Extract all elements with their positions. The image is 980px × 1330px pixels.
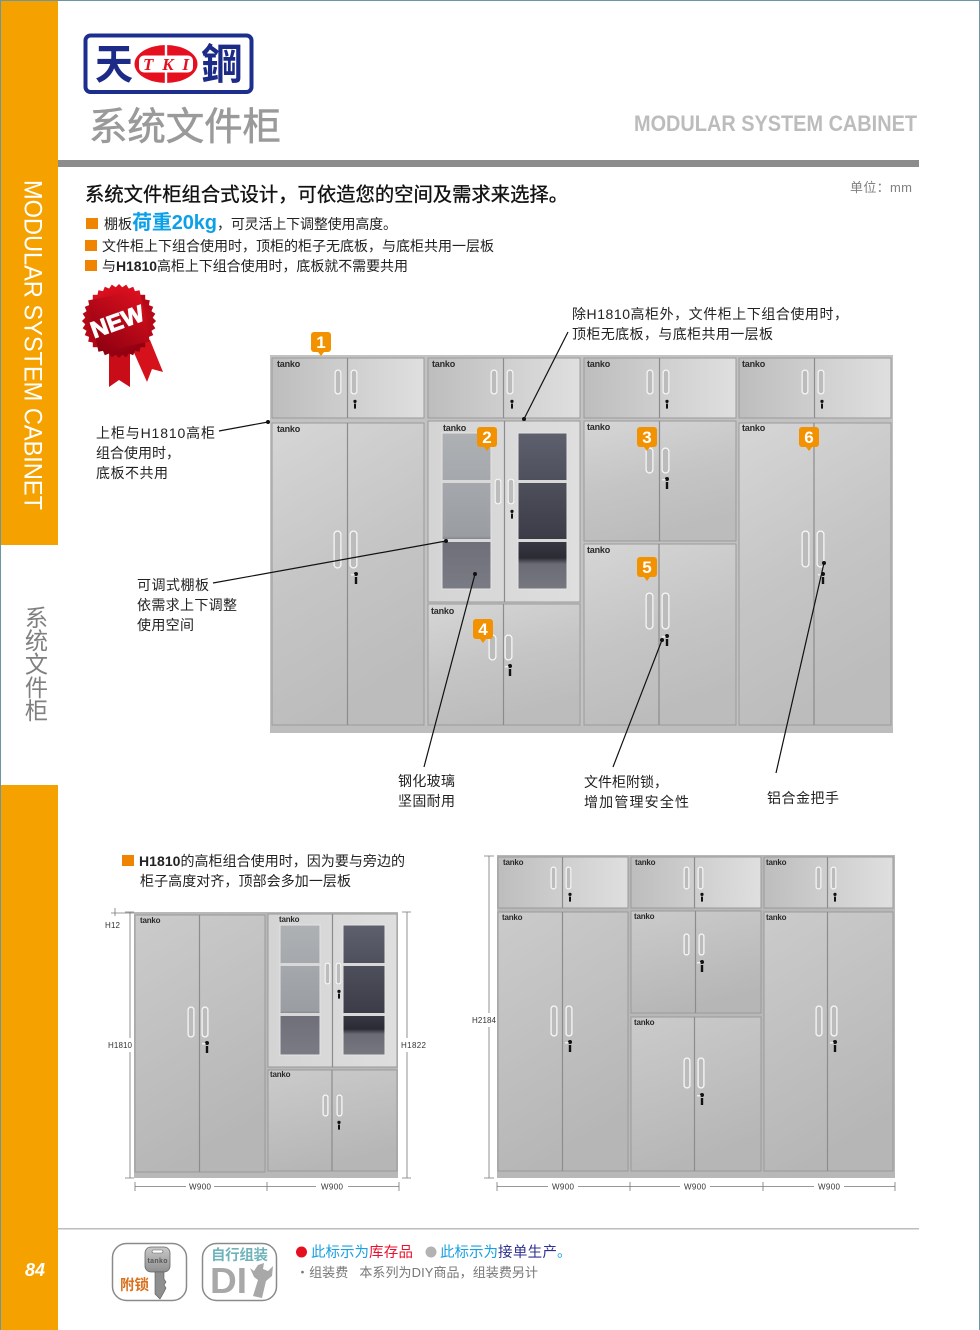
right tall cabinet: tanko xyxy=(766,913,787,922)
feature list: 与H1810高柜上下组合使用时，底板就不需要共用 xyxy=(102,258,408,274)
callout: aluminium handle xyxy=(767,561,839,806)
callout: adjustable shelf: 依需求上下调整 xyxy=(137,597,237,613)
callout: cabinet lock xyxy=(584,638,689,810)
icon: lock key: tanko xyxy=(148,1258,168,1265)
logo: TKI brand: TKI xyxy=(143,55,190,74)
icon: DIY assembly: DI xyxy=(210,1260,247,1301)
left tall cabinet: tanko xyxy=(502,913,523,922)
feature list: 棚板 xyxy=(104,216,132,232)
dimensions: H1810 combination: H1810 xyxy=(108,1041,133,1050)
dimensions: H1810 combination xyxy=(105,908,427,1192)
badge 2 xyxy=(477,427,497,451)
legend: stock and made to order: 。 xyxy=(557,1245,572,1261)
column 4 tall cabinet: tanko xyxy=(742,423,766,433)
dimensions: H1810 combination: W900 xyxy=(189,1182,212,1192)
right tall cabinet xyxy=(764,912,893,1171)
top cabinets: tanko xyxy=(277,359,301,369)
left tall cabinet xyxy=(498,912,628,1171)
icon: DIY assembly xyxy=(202,1244,276,1301)
logo: TKI brand: 鋼 xyxy=(201,31,243,92)
dimensions: three column wall xyxy=(472,856,895,1192)
lower cabinet xyxy=(268,1070,397,1171)
sidebar english title: MODULAR SYSTEM CABINET xyxy=(18,180,46,510)
left tall cabinet: tanko xyxy=(140,916,161,925)
dimensions: three column wall: H2184 xyxy=(472,1016,497,1025)
callout: top cabinet no base xyxy=(522,306,848,421)
sidebar chinese title: 统 xyxy=(25,628,48,654)
left tall cabinet xyxy=(135,915,265,1172)
badge 2: 2 xyxy=(482,428,492,447)
legend: stock and made to order: 接单生产 xyxy=(498,1244,557,1261)
upper glass cabinet xyxy=(268,914,397,1067)
column 3 upper cabinet xyxy=(584,421,736,541)
column 2 glass cabinet: tanko xyxy=(443,423,467,433)
note: H1810 combination xyxy=(122,853,405,889)
column 1 tall cabinet xyxy=(272,423,424,725)
note: H1810 combination: H1810的高柜组合使用时，因为要与旁边的 xyxy=(139,853,405,869)
top cabinets: tanko xyxy=(635,858,656,867)
feature list: ，可灵活上下调整使用高度。 xyxy=(217,216,397,232)
callout: tempered glass: 坚固耐用 xyxy=(398,793,455,809)
legend: stock and made to order: 此标示为 xyxy=(440,1244,498,1261)
callout: tempered glass: 钢化玻璃 xyxy=(398,773,455,789)
column 4 tall cabinet xyxy=(739,423,891,725)
header divider bar xyxy=(58,160,919,167)
column 2 lower cabinet xyxy=(428,604,580,725)
sidebar chinese title: 系 xyxy=(25,605,48,631)
icon: lock key: 附锁 xyxy=(120,1276,150,1294)
callout: adjustable shelf: 使用空间 xyxy=(137,617,194,633)
dimensions: three column wall: W900 xyxy=(684,1182,707,1192)
column 3 upper cabinet: tanko xyxy=(587,422,611,432)
badge 1: 1 xyxy=(316,333,326,352)
callout: top cabinet no base: 顶柜无底板，与底柜共用一层板 xyxy=(572,326,773,342)
badge 3: 3 xyxy=(642,428,652,447)
logo: TKI brand xyxy=(86,31,252,92)
badge 6 xyxy=(799,427,819,451)
dimensions: H1810 combination: H1822 xyxy=(401,1041,427,1050)
dimensions: H1810 combination: W900 xyxy=(321,1182,344,1192)
badge 6: 6 xyxy=(804,428,814,447)
diagram: H1810 combination cabinets xyxy=(134,912,398,1178)
badge 4: 4 xyxy=(478,620,488,639)
callout: top cabinet no base: 除H1810高柜外，文件柜上下组合使用时， xyxy=(572,306,848,322)
feature list xyxy=(85,211,494,274)
top cabinets: tanko xyxy=(587,359,611,369)
note: H1810 combination: 柜子高度对齐，顶部会多加一层板 xyxy=(140,873,351,889)
badge 1 xyxy=(311,332,331,356)
middle lower cabinet: tanko xyxy=(634,1018,655,1027)
icon: DIY assembly: 自行组装 xyxy=(211,1246,268,1264)
callout: cabinet lock: 增加管理安全性 xyxy=(584,794,689,810)
lower cabinet: tanko xyxy=(270,1070,291,1079)
title: english: MODULAR SYSTEM CABINET xyxy=(634,111,918,136)
sidebar chinese title: 柜 xyxy=(25,698,48,724)
callout: adjustable shelf: 可调式棚板 xyxy=(137,577,209,593)
column 3 lower cabinet xyxy=(584,544,736,725)
icon: NEW seal xyxy=(82,284,163,387)
title: chinese: 系统文件柜 xyxy=(89,106,281,149)
badge 5 xyxy=(637,557,657,581)
feature list: 文件柜上下组合使用时，顶柜的柜子无底板，与底柜共用一层板 xyxy=(102,238,494,254)
legend: stock and made to order: 此标示为 xyxy=(311,1244,369,1261)
badge 5: 5 xyxy=(642,558,652,577)
top cabinets xyxy=(272,358,891,418)
top cabinets: tanko xyxy=(503,858,524,867)
dimensions: three column wall: W900 xyxy=(552,1182,575,1192)
icon: NEW seal: NEW xyxy=(87,300,148,343)
column 2 glass cabinet xyxy=(428,421,580,602)
sidebar chinese title xyxy=(25,605,48,724)
main cabinet wall xyxy=(270,355,893,733)
top cabinets xyxy=(498,857,893,908)
top cabinets: tanko xyxy=(766,858,787,867)
callout: top cabinet without shared base xyxy=(96,420,270,481)
column 3 lower cabinet: tanko xyxy=(587,545,611,555)
column 1 tall cabinet: tanko xyxy=(277,424,301,434)
unit note: 单位：mm xyxy=(850,180,912,195)
top cabinets: tanko xyxy=(742,359,766,369)
callout: top cabinet without shared base: 底板不共用 xyxy=(96,465,168,481)
middle upper cabinet: tanko xyxy=(634,912,655,921)
column 2 lower cabinet: tanko xyxy=(431,606,455,616)
middle upper cabinet xyxy=(631,911,761,1013)
callout: cabinet lock: 文件柜附锁， xyxy=(584,774,668,790)
callout: tempered glass xyxy=(398,572,477,809)
footer divider xyxy=(58,1228,919,1230)
legend: stock and made to order xyxy=(296,1244,572,1261)
legend: stock and made to order: 库存品 xyxy=(369,1244,413,1261)
badge 4 xyxy=(473,619,493,643)
feature list: 荷重20kg xyxy=(132,211,217,234)
callout: top cabinet without shared base: 组合使用时， xyxy=(96,445,180,461)
callout: top cabinet without shared base: 上柜与H1810高柜 xyxy=(96,425,215,441)
icon: lock key xyxy=(112,1244,186,1300)
note: assembly fee: ・组装费 本系列为DIY商品，组装费另计 xyxy=(296,1265,538,1280)
main heading: 系统文件柜组合式设计，可依造您的空间及需求来选择。 xyxy=(85,184,568,206)
middle lower cabinet xyxy=(631,1017,761,1171)
dimensions: H1810 combination: H12 xyxy=(105,921,121,930)
dimensions: three column wall: W900 xyxy=(818,1182,841,1192)
top cabinets: tanko xyxy=(432,359,456,369)
sidebar chinese title: 文 xyxy=(25,652,48,678)
sidebar chinese title: 件 xyxy=(25,675,48,701)
page number: 84 xyxy=(25,1260,45,1280)
badge 3 xyxy=(637,427,657,451)
callout: adjustable shelf xyxy=(137,539,448,633)
logo: TKI brand: 天 xyxy=(95,31,133,92)
diagram: three column wall xyxy=(497,855,895,1178)
callout: aluminium handle: 铝合金把手 xyxy=(767,790,839,806)
upper glass cabinet: tanko xyxy=(279,915,300,924)
